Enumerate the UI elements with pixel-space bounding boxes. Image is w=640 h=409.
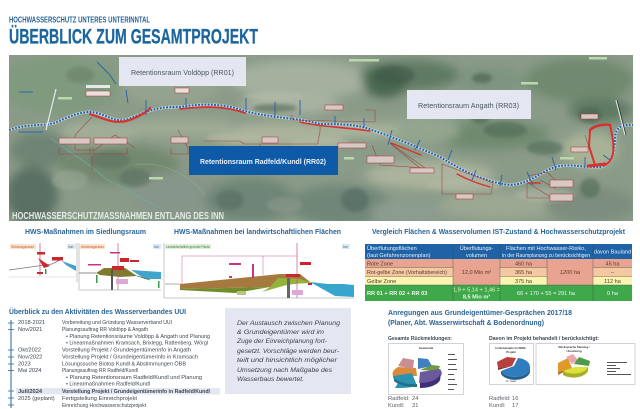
timeline of activities: Einreichung Hochwasserschutzprojekt xyxy=(62,403,146,409)
comparison table: 66 + 170 + 55 = 291 ha xyxy=(517,291,576,297)
comparison table: 460 ha xyxy=(515,262,533,268)
label: Retentionsraum Angath xyxy=(407,90,531,119)
comparison table xyxy=(365,244,632,301)
timeline of activities: Okt/2022 xyxy=(18,348,41,354)
comparison table: 45 ha xyxy=(606,262,620,268)
comparison table: Flächen mit Hochwasser-Risiko, xyxy=(506,246,586,252)
pie chart: Ja behandelt: Im Behandeln im WWA- xyxy=(495,346,527,350)
counts: behandelt: Kundl: xyxy=(489,403,506,409)
timeline of activities: • Planung Retentionsräume Voldöpp & Angath und Planung xyxy=(66,334,210,340)
blue side drains xyxy=(19,62,610,186)
comparison table: 1,9 + 5,14 + 1,46 = xyxy=(453,288,500,294)
comparison table: 112 ha xyxy=(604,279,622,285)
callout: Austausch Planung und Grundeigentümer: Der Austausch zwischen Planung xyxy=(237,320,340,327)
comparison table: davon Bauland xyxy=(594,250,631,256)
counts: behandelt xyxy=(489,396,518,409)
heading: Anregungen: Anregungen aus Grundeigentümer-Gesprächen 2017/18 xyxy=(388,308,572,317)
callout: Austausch Planung und Grundeigentümer: teilt und hinsichtlich möglicher xyxy=(237,357,338,364)
label: Retentionsraum Voldöpp xyxy=(119,57,246,86)
comparison table: (laut Gefahrenzonenplan) xyxy=(367,253,431,259)
subtitle: HOCHWASSERSCHUTZ UNTERES UNTERINNTAL xyxy=(9,14,150,24)
chart label: Davon behandelt: Davon im Projekt behandelt / berücksichtigt: xyxy=(489,336,599,342)
heading: Siedlungsraum: HWS-Maßnahmen im Siedlungsraum xyxy=(25,227,146,236)
timeline of activities: Lösungssuche Biotop Kundl & Abstimmungen ÖBB xyxy=(62,360,186,368)
comparison table: – xyxy=(611,270,615,276)
cross section 2: Siedlungsraum with dam: Inn xyxy=(154,245,159,249)
tributary river xyxy=(50,138,158,208)
comparison table: 8,5 Mio m³ xyxy=(463,294,490,300)
timeline of activities: Vorbereitung und Gründung Wasserverband UUI xyxy=(62,320,172,326)
callout: Austausch Planung und Grundeigentümer: gesetzt. Vorschläge werden beur- xyxy=(237,348,339,355)
comparison table: volumen xyxy=(466,253,487,259)
comparison table: Überflutungsflächen xyxy=(367,245,417,252)
comparison table: 0 ha xyxy=(607,291,619,297)
panel: aerial map of the Inn valley xyxy=(0,55,635,225)
timeline of activities: 2018-2021 xyxy=(18,320,45,326)
timeline of activities: 2025 (geplant) xyxy=(18,396,55,402)
table rows: Rote Zone xyxy=(367,262,393,268)
counts: total xyxy=(388,396,419,409)
pie chart: Gesamte Rückmeldungen: Gemeinde xyxy=(419,346,434,350)
timeline of activities: • Linearmaßnahmen Kramsach, Brixlegg, Rattenberg, Wörgl xyxy=(66,340,208,346)
chart label: Gesamte Rückmeldungen: Gesamte Rückmeldungen: xyxy=(388,336,452,342)
label: Retentionsraum Angath: Retentionsraum Angath (RR03) xyxy=(418,101,519,110)
comparison table: Rot-gelbe Zone (Vorhaltsbereich) xyxy=(367,270,447,276)
highlighted row xyxy=(16,388,220,394)
callout: Austausch Planung und Grundeigentümer: Zuge der Einreichplanung fort- xyxy=(236,338,327,345)
label: Retentionsraum Radfeld/Kundl: Retentionsraum Radfeld/Kundl (RR02) xyxy=(200,157,326,166)
comparison table: Überflutungs- xyxy=(460,245,493,252)
timeline of activities xyxy=(8,320,220,409)
cross section 2: Siedlungsraum with dam xyxy=(79,243,161,290)
counts: behandelt: Radfeld: xyxy=(489,396,511,402)
comparison table: in der Raumplanung zu berücksichtigen xyxy=(502,253,590,259)
pie chart: Ja behandelt xyxy=(490,344,534,384)
counts: total: Kundl: xyxy=(388,403,405,409)
railway mark xyxy=(46,89,625,135)
cross section 3: landwirtschaftlich genutzte Fläche xyxy=(164,243,354,298)
comparison table: RR 01 + RR 02 + RR 03 xyxy=(367,291,427,297)
counts: behandelt: 16 xyxy=(512,396,518,402)
label: Retentionsraum Voldöpp: Retentionsraum Voldöpp (RR01) xyxy=(131,68,234,77)
timeline of activities: • Linearmaßnahmen Radfeld/Kundl xyxy=(66,382,150,388)
timeline of activities: 2023 xyxy=(18,362,31,368)
pie chart: Ja behandelt: Projekt xyxy=(506,350,516,354)
header: project subtitle and title xyxy=(9,14,258,48)
maintenance outlines in dark red xyxy=(59,110,592,198)
small place labels xyxy=(58,57,607,201)
comparison table: 365 ha xyxy=(515,270,533,276)
pie chart: Ja behandelt: Nr. Saas xyxy=(506,379,517,383)
timeline of activities: Nov/2021 xyxy=(18,327,42,333)
heading: Anregungen xyxy=(388,308,572,327)
cross section 3: landwirtschaftlich genutzte Fläche: Landwirtschaftlich genutzte Fläche xyxy=(166,245,210,249)
heading: Anregungen: (Planer, Abt. Wasserwirtschaft & Bodenordnung) xyxy=(388,318,544,327)
counts: total: 31 xyxy=(412,403,418,409)
heading: Vergleich: Vergleich Flächen & Wasservolumen IST-Zustand & Hochwasserschutzprojekt xyxy=(372,227,625,236)
flood protection lines in red xyxy=(90,107,613,187)
heading: landwirtschaftliche Flächen: HWS-Maßnahmen bei landwirtschaftlichen Flächen xyxy=(174,227,341,236)
callout: Austausch Planung und Grundeigentümer: & Grundeigentümer wird im xyxy=(237,329,325,336)
timeline of activities: Nov/2022 xyxy=(18,354,42,360)
cross section 2: Siedlungsraum with dam: Siedlungsraum xyxy=(81,245,104,249)
timeline of activities: Planungsauftrag RR Voldöpp & Angath xyxy=(62,327,148,333)
comparison table: Gelbe Zone xyxy=(367,279,396,285)
pie chart: Rücksprache Planung: Rücksprache Planung / xyxy=(559,345,590,349)
callout: Austausch Planung und Grundeigentümer: Umsetzung nach Maßgabe des xyxy=(237,367,333,374)
timeline axis xyxy=(8,320,14,408)
label: Retentionsraum Radfeld/Kundl xyxy=(189,146,338,175)
comparison table: 12,0 Mio m³ xyxy=(462,270,491,276)
counts: total: 24 xyxy=(412,396,419,402)
map caption: HOCHWASSERSCHUTZMASSNAHMEN ENTLANG DES INN xyxy=(12,211,224,222)
pie chart: Gesamte Rückmeldungen xyxy=(388,344,464,394)
cross section 1: Siedlungsraum small: Inn xyxy=(68,245,73,249)
timeline of activities: Planungsauftrag RR Radfeld/Kundl xyxy=(62,368,138,374)
timeline of activities: • Planung Retentionsraum Radfeld/Kundl und Planung xyxy=(66,375,202,381)
timeline of activities: Vorstellung Projekt / Grundeigentümerinfo in Radfeld/Kundl xyxy=(62,389,210,395)
timeline of activities: Mai 2024 xyxy=(18,368,41,374)
map terrain xyxy=(0,57,635,225)
cross section 1: Siedlungsraum small: Siedlungsraum xyxy=(11,245,34,249)
counts: behandelt: 17 xyxy=(512,403,518,409)
cross section 3: landwirtschaftlich genutzte Fläche: Inn xyxy=(343,245,348,249)
cross section 1: Siedlungsraum small xyxy=(9,243,77,282)
counts: total: Radfeld: xyxy=(388,396,410,402)
timeline of activities: Juli/2024 xyxy=(18,389,43,395)
timeline of activities: Vorstellung Projekt / Grundeigentümerinfo in Angath xyxy=(62,348,191,354)
pie chart: Rücksprache Planung: Umsetzung xyxy=(566,349,582,353)
map texture xyxy=(52,64,602,213)
pie chart: Rücksprache Planung xyxy=(536,344,635,384)
heading: Aktivitäten: Überblick zu den Aktivitäten des Wasserverbandes UUI xyxy=(9,307,186,316)
callout: Austausch Planung und Grundeigentümer xyxy=(225,308,351,394)
timeline of activities: Fertigstellung Einreichprojekt xyxy=(62,396,137,402)
title: ÜBERBLICK ZUM GESAMTPROJEKT xyxy=(9,26,258,48)
timeline of activities: Vorstellung Projekt / Grundeigentümerinfo in Kramsach xyxy=(62,354,198,360)
comparison table: 375 ha xyxy=(515,279,533,285)
river Inn xyxy=(9,105,633,185)
callout: Austausch Planung und Grundeigentümer: Wasserbaus bewertet. xyxy=(237,376,304,383)
comparison table: 1200 ha xyxy=(560,270,580,276)
table header xyxy=(365,244,632,259)
